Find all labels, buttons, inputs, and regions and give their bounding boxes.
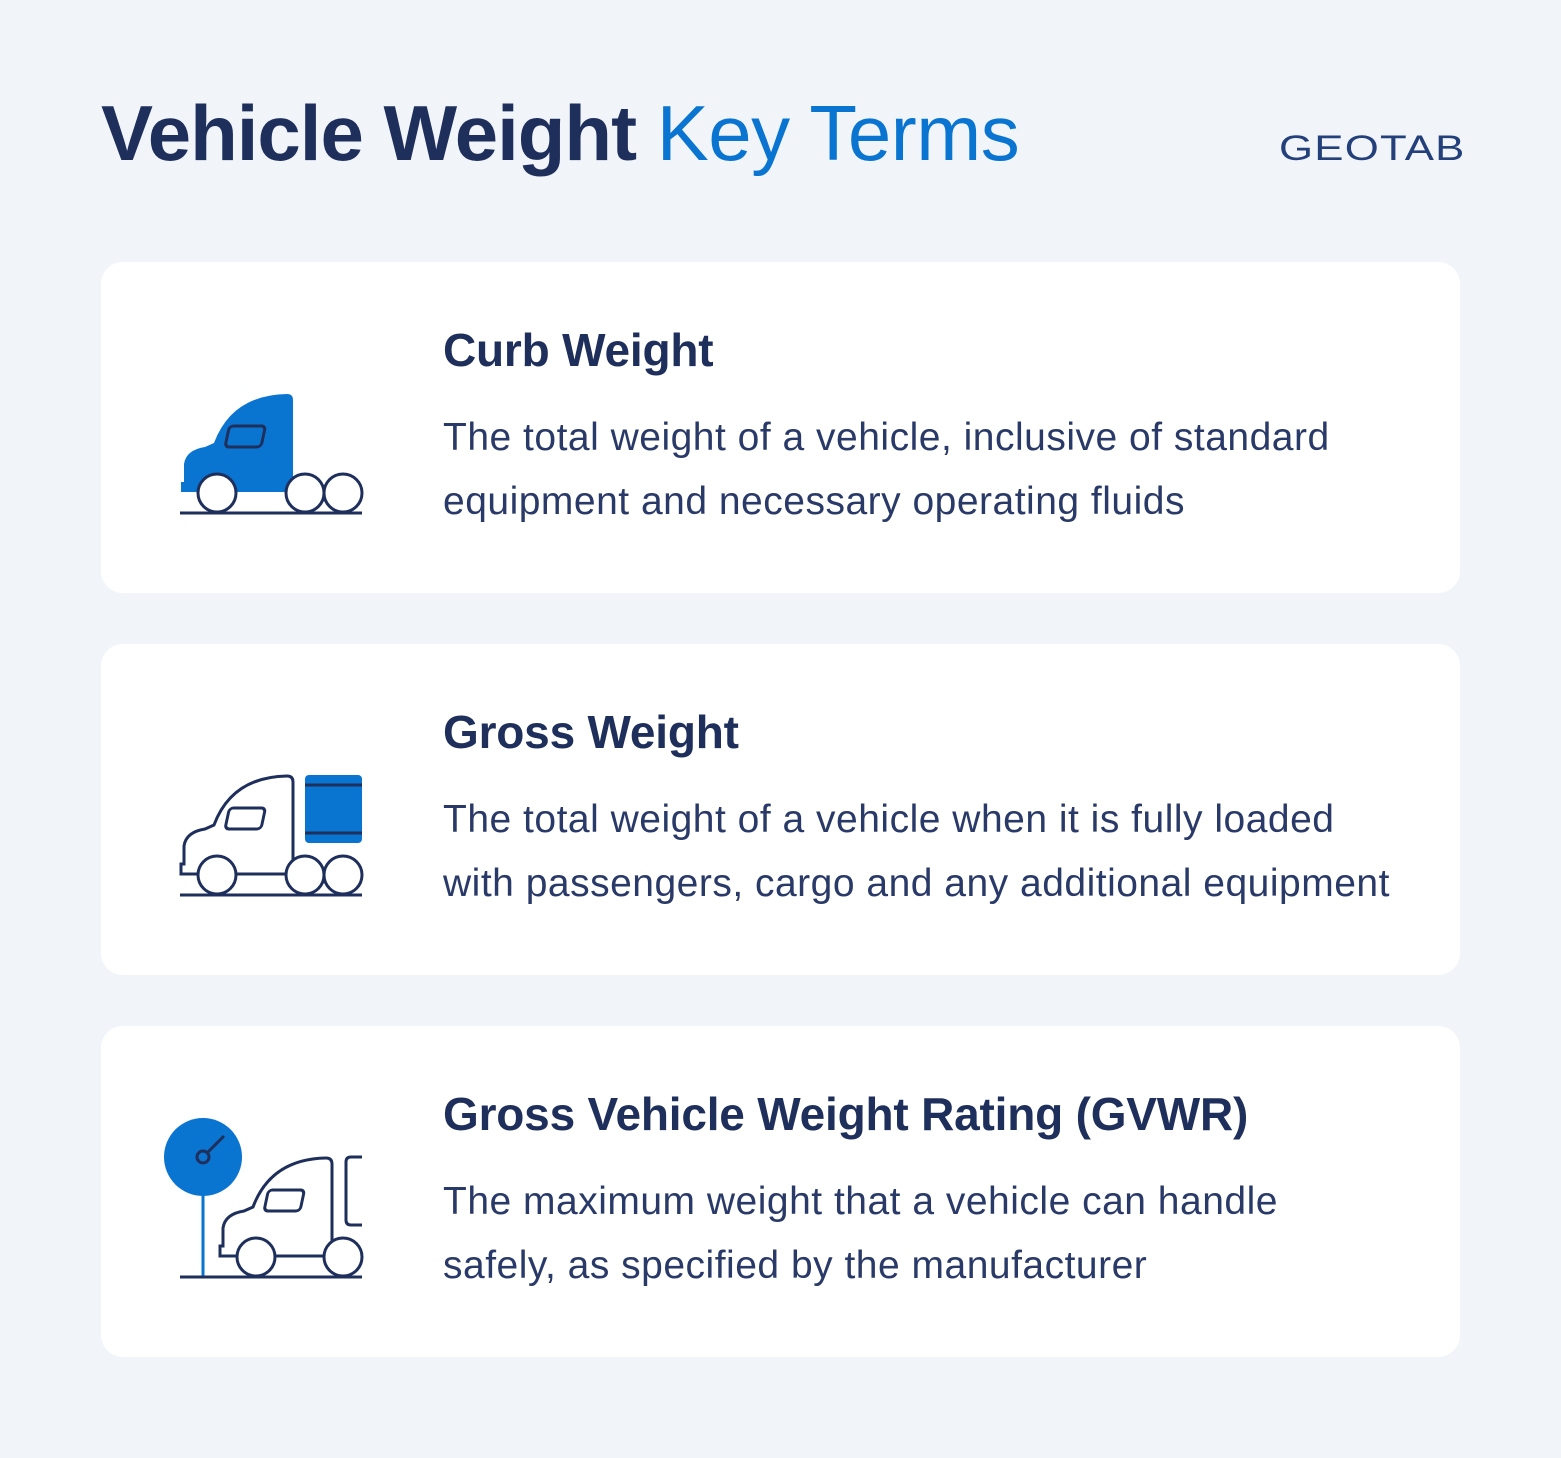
panel: gross weight [101,644,1460,975]
logo: GEOTAB: GEOTAB [1279,129,1466,168]
icon: GVWR truck with gauge [164,1118,362,1277]
icon: curb weight truck [180,394,362,513]
title: Vehicle Weight Key Terms [101,89,1019,177]
text: curb weight definition: The total weight of a vehicle, inclusive of standard [443,416,1330,459]
icon: gross weight truck with cargo [180,775,362,895]
text: gross weight definition: with passengers, cargo and any additional equipment [443,862,1390,905]
text: curb weight definition [443,416,1330,523]
text: GVWR definition: The maximum weight that a vehicle can handle [443,1180,1278,1223]
panel: curb weight [101,262,1460,593]
text: GVWR definition [443,1180,1278,1287]
text: gross weight definition: The total weight of a vehicle when it is fully loaded [443,798,1334,841]
heading: GVWR: Gross Vehicle Weight Rating (GVWR) [443,1088,1248,1140]
heading: gross weight: Gross Weight [443,706,739,758]
text: gross weight definition [443,798,1390,905]
text: curb weight definition: equipment and necessary operating fluids [443,480,1185,523]
heading: curb weight: Curb Weight [443,324,713,376]
text: GVWR definition: safely, as specified by the manufacturer [443,1244,1147,1287]
panel: GVWR [101,1026,1460,1357]
